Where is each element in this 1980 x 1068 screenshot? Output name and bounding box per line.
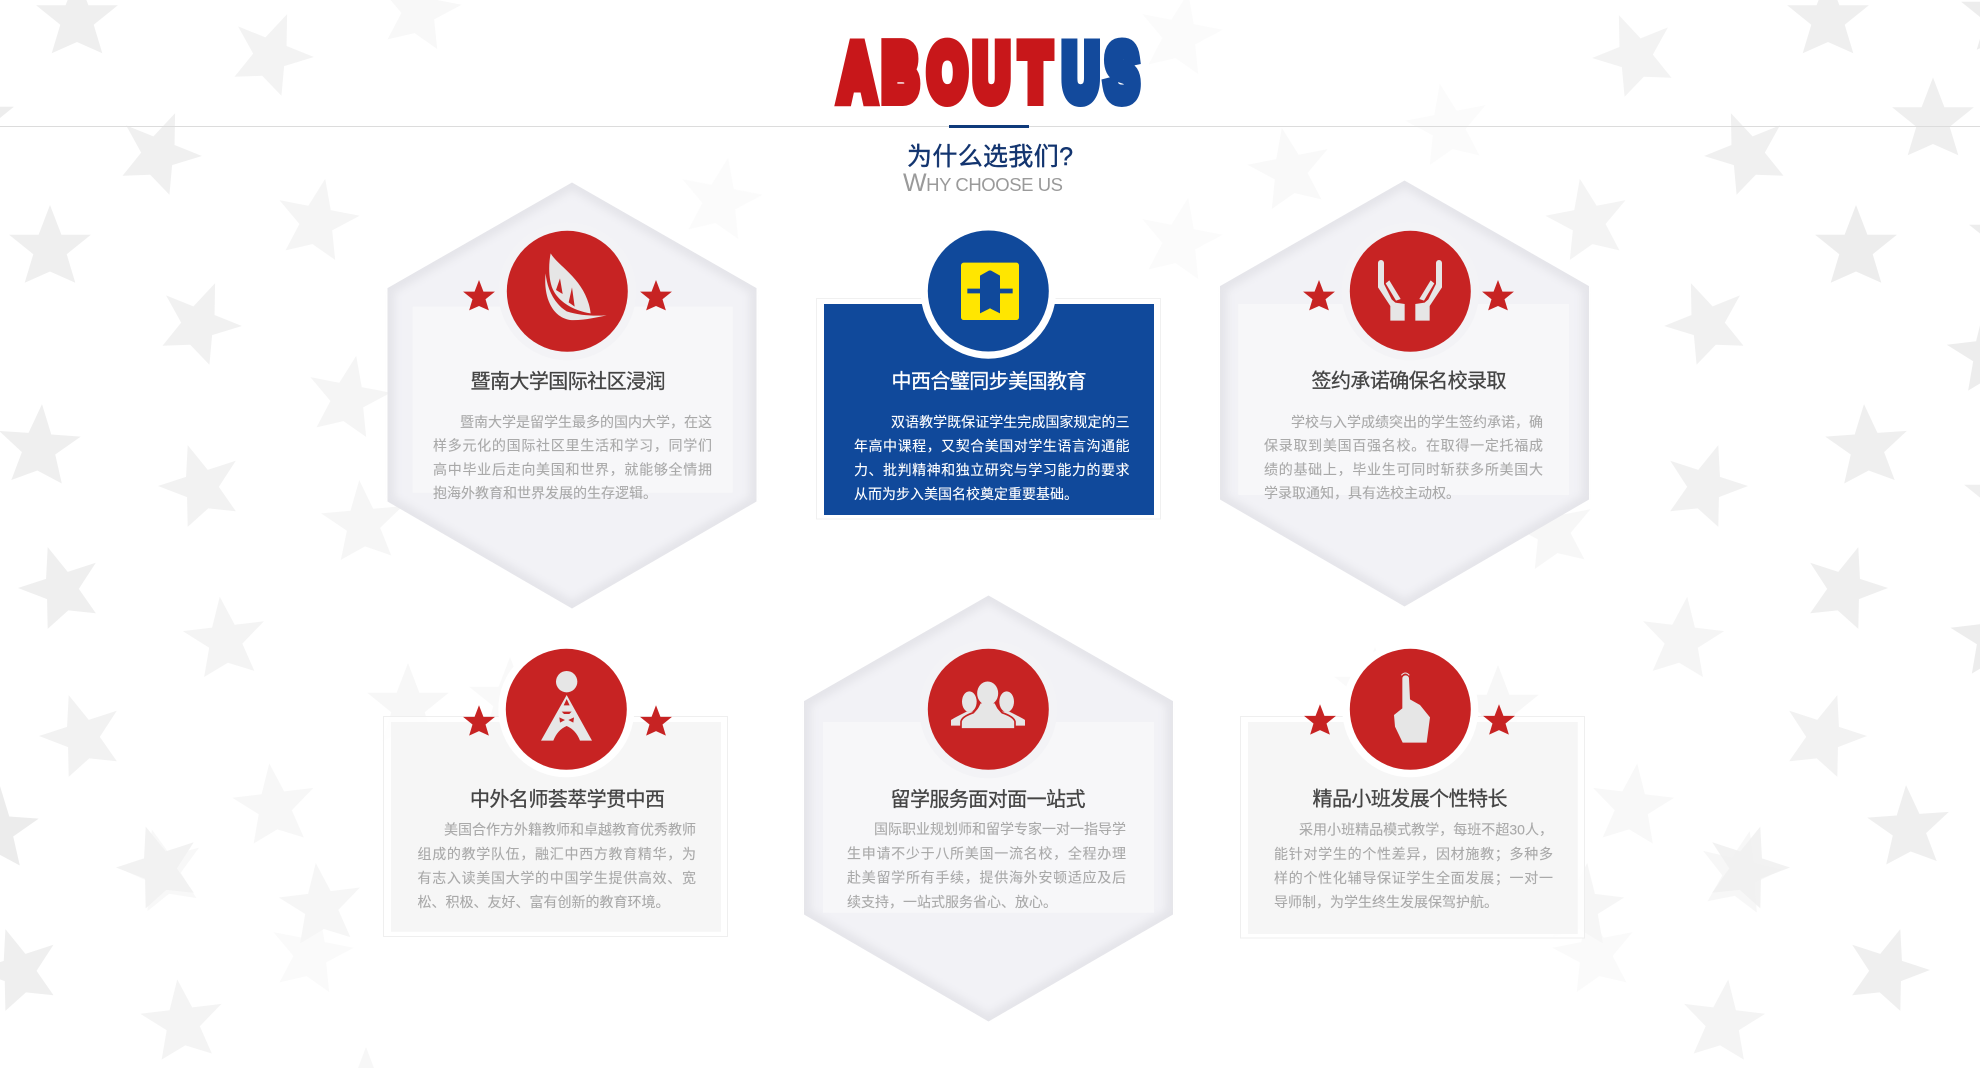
text block: 组成的教学队伍，融汇中西方教育精华，为 [418, 846, 696, 862]
icon: leaf [507, 231, 628, 352]
panel: signed admission promise [1220, 180, 1589, 606]
title accent bar [949, 125, 1029, 128]
text block: 能针对学生的个性差异，因材施教；多种多 [1274, 846, 1553, 863]
text block [1264, 414, 1543, 501]
text block: 保录取到美国百强名校。在取得一定托福成 [1264, 438, 1543, 454]
text block: 续支持，一站式服务省心、放心。 [847, 894, 1057, 910]
text block: 有志入读美国大学的中国学生提供高效、宽 [418, 870, 696, 886]
text block: 采用小班精品模式教学，每班不超30人， [1299, 822, 1553, 838]
icon: star left [463, 280, 495, 310]
heading: 留学服务面对面一站式 [890, 788, 1086, 811]
subtitle: Chinese: 为什么选我们? [907, 143, 1073, 171]
subtitle: English: WHY CHOOSE US [903, 169, 1063, 197]
icon: yellow badge [928, 230, 1049, 352]
title: ABOUT US: US [1063, 29, 1138, 116]
text block: 高中毕业后走向美国和世界，就能够全情拥 [433, 462, 712, 478]
heading: 暨南大学国际社区浸润 [470, 370, 666, 393]
text block [1274, 822, 1553, 910]
icon: people [928, 649, 1049, 770]
text block: 抱海外教育和世界发展的生存逻辑。 [433, 485, 657, 501]
panel: Jinan University community [388, 182, 756, 608]
icon: star right [1482, 280, 1514, 310]
text block: 学录取通知，具有选校主动权。 [1264, 485, 1460, 501]
icon: hands [1350, 231, 1471, 352]
icon: star right [640, 280, 672, 310]
icon: star right [640, 705, 672, 736]
panel: one-stop service [804, 596, 1173, 1022]
icon: tower [506, 649, 627, 770]
heading: 中外名师荟萃学贯中西 [470, 788, 665, 811]
title: ABOUT US: ABOUT [839, 29, 1051, 116]
text block: 学校与入学成绩突出的学生签约承诺，确 [1291, 414, 1543, 430]
text block: 国际职业规划师和留学专家一对一指导学 [874, 821, 1126, 837]
heading: 精品小班发展个性特长 [1312, 788, 1508, 810]
icon: star left [463, 705, 495, 736]
icon: star left [1303, 280, 1335, 310]
text block [847, 821, 1126, 910]
heading: 签约承诺确保名校录取 [1312, 370, 1506, 392]
icon: pointing hand [1350, 649, 1471, 770]
panel: Sino-Western curriculum (highlighted) [816, 223, 1160, 519]
text block: 样的个性化辅导保证学生全面发展；一对一 [1274, 870, 1553, 887]
text block: 暨南大学是留学生最多的国内大学，在这 [460, 414, 712, 430]
panel: small classes [1240, 641, 1584, 938]
text block: 力、批判精神和独立研究与学习能力的要求 [854, 462, 1130, 478]
icon: star left [1304, 704, 1336, 735]
text block: 双语教学既保证学生完成国家规定的三 [891, 414, 1130, 430]
text block: 美国合作方外籍教师和卓越教育优秀教师 [444, 822, 696, 838]
text block: 从而为步入美国名校奠定重要基础。 [854, 486, 1078, 502]
panel: renowned teachers [384, 641, 728, 936]
text block: 赴美留学所有手续，提供海外安顿适应及后 [847, 870, 1126, 886]
text block [854, 414, 1130, 502]
text block [418, 822, 696, 910]
heading: 中西合璧同步美国教育 [892, 370, 1086, 393]
text block: 导师制，为学生终生发展保驾护航。 [1274, 894, 1498, 910]
text block: 样多元化的国际社区里生活和学习，同学们 [433, 438, 712, 454]
text block: 松、积极、友好、富有创新的教育环境。 [418, 894, 670, 910]
icon: star right [1483, 704, 1515, 735]
text block: 绩的基础上，毕业生可同时斩获多所美国大 [1264, 462, 1543, 478]
text block [433, 414, 712, 501]
text block: 年高中课程，又契合美国对学生语言沟通能 [854, 438, 1130, 454]
text block: 生申请不少于八所美国一流名校，全程办理 [847, 846, 1126, 862]
